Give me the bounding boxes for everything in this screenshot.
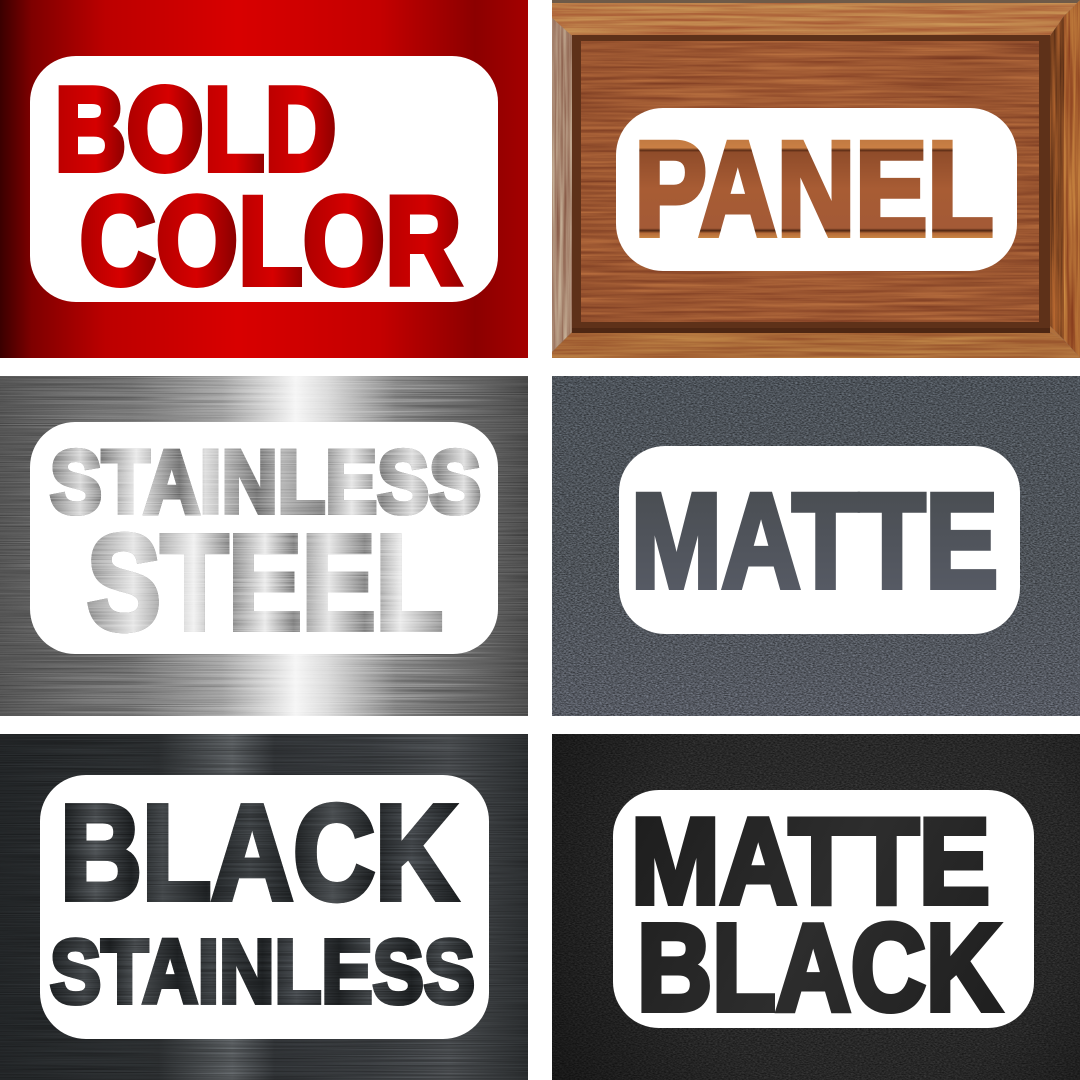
heading: MATTE: MATTE — [631, 793, 990, 929]
heading: PANEL: PANEL — [634, 115, 994, 264]
brushed steel background — [0, 376, 528, 716]
heading: COLOR: COLOR — [80, 172, 462, 311]
heading: BLACK: BLACK — [637, 900, 1001, 1037]
heading: STEEL: STEEL — [87, 507, 443, 658]
heading: MATTE: MATTE — [631, 467, 998, 616]
white label plate — [30, 56, 498, 302]
heading: STAINLESS: STAINLESS — [50, 432, 481, 532]
wood frame background — [552, 0, 1080, 358]
white label plate — [30, 422, 498, 654]
panel: bold color — [0, 0, 528, 358]
panel: wood panel — [552, 0, 1080, 358]
panel: stainless steel — [0, 376, 528, 716]
speckled black background — [552, 734, 1080, 1080]
white label plate — [613, 790, 1034, 1028]
panel: black stainless — [0, 734, 528, 1080]
heading: STAINLESS: STAINLESS — [50, 922, 475, 1022]
dark brushed background — [0, 734, 528, 1080]
panel: matte — [552, 376, 1080, 716]
white label plate — [616, 108, 1017, 271]
red gradient background — [0, 0, 528, 358]
textured grey background — [552, 376, 1080, 716]
white label plate — [619, 446, 1020, 634]
panel: matte black — [552, 734, 1080, 1080]
heading: BOLD: BOLD — [54, 63, 336, 196]
white label plate — [40, 775, 489, 1039]
heading: BLACK: BLACK — [60, 777, 457, 928]
